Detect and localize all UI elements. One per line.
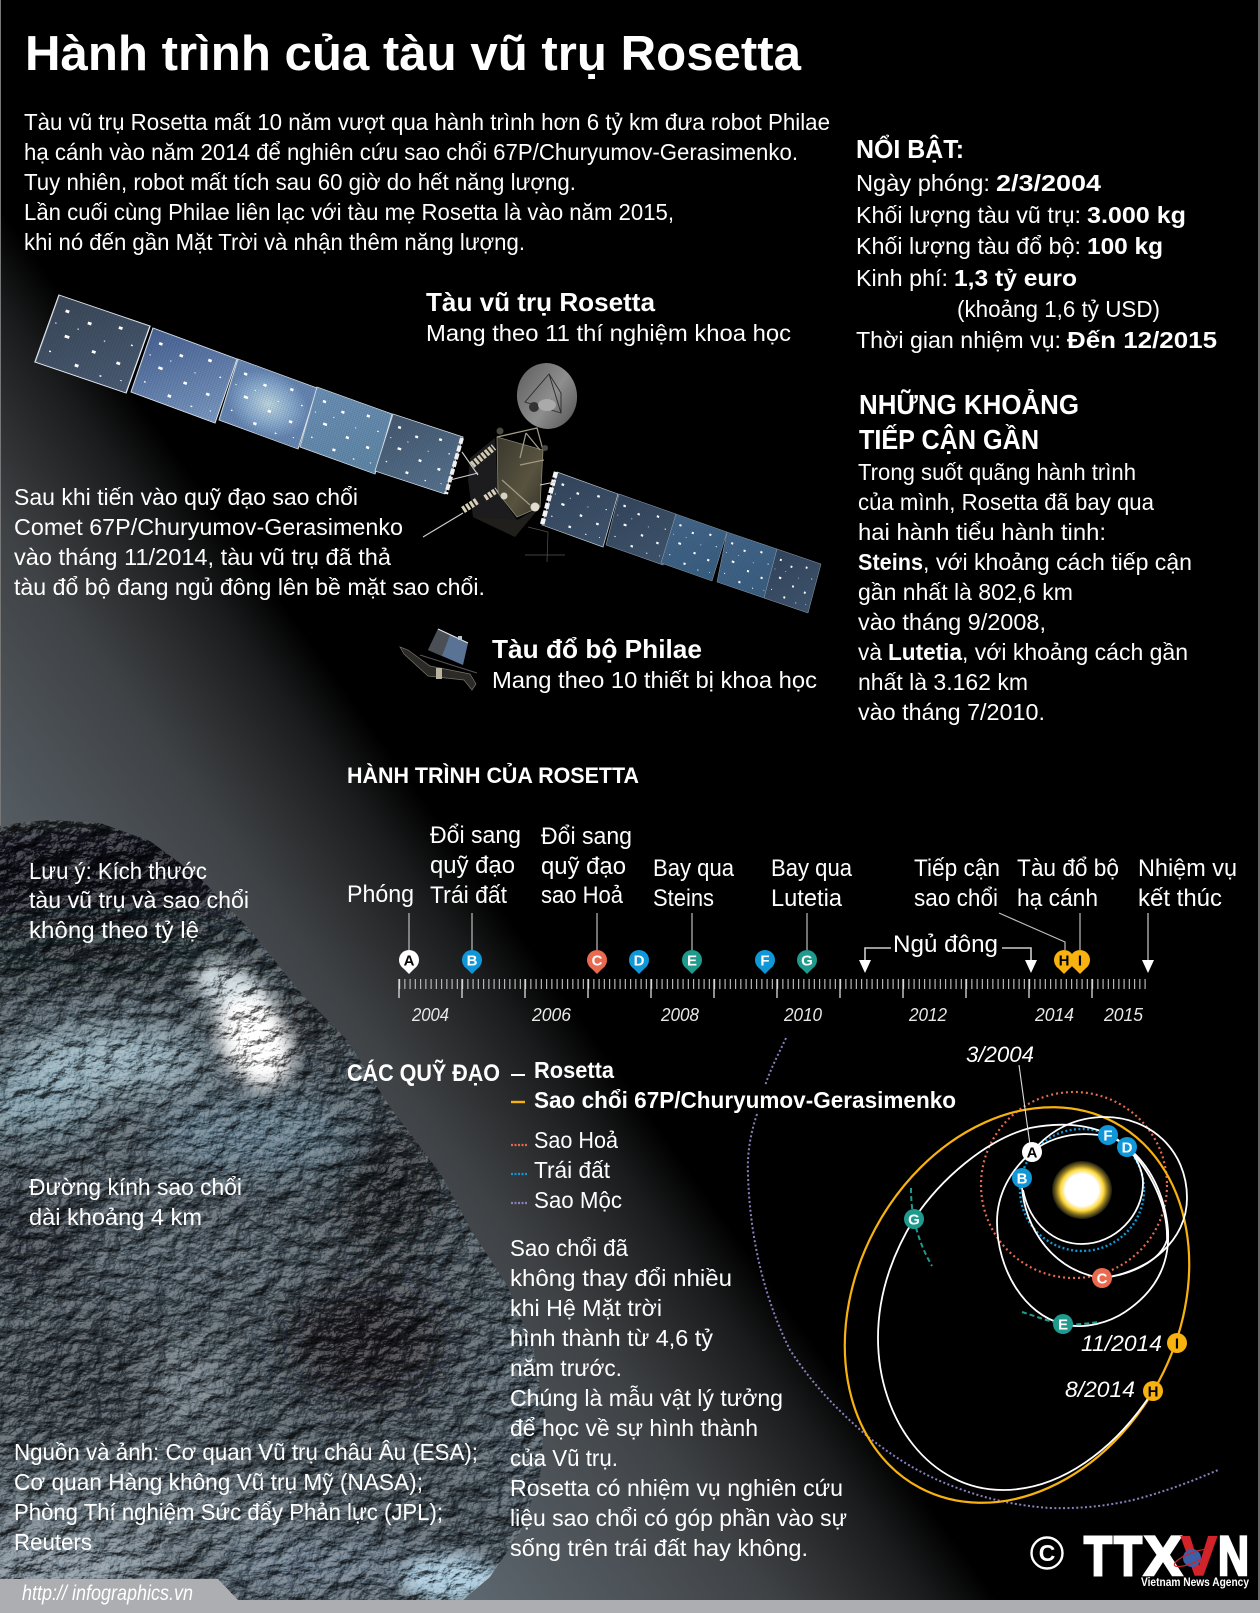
title: Hành trình của tàu vũ trụ Rosetta: [25, 27, 802, 81]
source credits: Reuters: [14, 1529, 92, 1555]
text: comet significance: để học về sự hình thành: [510, 1415, 758, 1441]
timeline event labels: Tàu đổ bộ: [1017, 855, 1119, 882]
text: comet significance: sống trên trái đất hay không.: [510, 1535, 808, 1561]
text: comet orbit release note: Sau khi tiến vào quỹ đạo sao chổi: [14, 484, 358, 510]
timeline pins A to I: I: [1078, 952, 1082, 970]
panel: close approaches: Lutetia: [888, 639, 963, 665]
timeline event labels: Bay qua: [653, 855, 735, 882]
timeline pins A to I: B: [467, 952, 478, 970]
Rosetta trajectory: [878, 1117, 1187, 1490]
copyright symbol: [1032, 1538, 1062, 1568]
heading: Rosetta spacecraft: [426, 287, 791, 346]
timeline year labels: 2015: [1103, 1005, 1144, 1025]
heading: Rosetta spacecraft: Tàu vũ trụ Rosetta: [426, 287, 656, 317]
comet note: diameter: dài khoảng 4 km: [29, 1204, 202, 1230]
timeline year labels: 2014: [1034, 1005, 1074, 1025]
comet note: scale: Lưu ý: Kích thước: [29, 858, 207, 884]
text: comet orbit release note: Comet 67P/Churyumov-Gerasimenko: [14, 514, 403, 540]
panel: close approaches: , với khoảng cách gần: [962, 639, 1188, 665]
hibernation marker: Ngủ đông: [893, 931, 998, 958]
panel: highlights: Đến 12/2015: [1067, 327, 1217, 353]
comet note: diameter: [29, 1174, 242, 1230]
panel: highlights: 3.000 kg: [1087, 202, 1186, 228]
text: comet significance: không thay đổi nhiều: [510, 1265, 732, 1291]
timeline event labels: sao Hoả: [541, 882, 624, 909]
timeline pins A to I: G: [801, 952, 813, 970]
timeline event labels: Đổi sang: [541, 823, 632, 850]
orbit pins and dates: C: [1097, 1270, 1108, 1288]
text: comet significance: Chúng là mẫu vật lý tưởng: [510, 1385, 783, 1411]
timeline heading: HÀNH TRÌNH CỦA ROSETTA: [347, 763, 639, 788]
source credits: Cơ quan Hàng không Vũ trụ Mỹ (NASA);: [14, 1469, 423, 1495]
launch date leader: [1019, 1065, 1030, 1145]
orbit legend: Sao Hoả: [534, 1127, 619, 1153]
comet note: scale: tàu vũ trụ và sao chổi: [29, 887, 249, 913]
panel: close approaches: gần nhất là 802,6 km: [858, 579, 1073, 605]
timeline axis and ticks: [399, 979, 1149, 998]
timeline year labels: 2012: [908, 1005, 947, 1025]
comet note: scale: không theo tỷ lệ: [29, 917, 199, 943]
orbit pins and dates: 11/2014: [1081, 1331, 1162, 1356]
TTXVN logo: X: [1144, 1524, 1182, 1587]
Mars orbit: [981, 1092, 1167, 1278]
heading: Philae lander: [492, 634, 817, 693]
panel: close approaches: Steins: [858, 549, 923, 575]
orbit pins and dates: G: [908, 1212, 920, 1228]
Earth orbit: [1020, 1129, 1144, 1251]
panel: highlights: NỔI BẬT:: [856, 134, 964, 164]
orbit pins and dates: D: [1122, 1140, 1133, 1156]
mission end arrow: [1142, 913, 1154, 973]
panel: highlights: Khối lượng tàu vũ trụ:: [856, 202, 1081, 228]
left solar wing: [35, 295, 463, 494]
text: comet significance: [510, 1235, 847, 1561]
timeline pins A to I: H: [1059, 952, 1069, 970]
bottom band: [0, 1579, 1260, 1613]
source credits: [14, 1439, 478, 1555]
orbit pins and dates: B: [1017, 1170, 1028, 1188]
panel: close approaches: Trong suốt quãng hành trình: [858, 459, 1136, 485]
intro text block: [24, 109, 830, 255]
timeline event labels: Nhiệm vụ: [1138, 855, 1237, 882]
panel: close approaches: nhất là 3.162 km: [858, 669, 1028, 695]
asteroid orbit segments: [911, 1188, 1098, 1324]
heading: Rosetta spacecraft: Mang theo 11 thí nghiệm khoa học: [426, 320, 791, 346]
comet note: diameter: Đường kính sao chổi: [29, 1174, 242, 1200]
orbit pins and dates: I: [1175, 1336, 1179, 1352]
timeline event labels: hạ cánh: [1017, 885, 1098, 912]
panel: close approaches: NHỮNG KHOẢNG: [859, 388, 1079, 420]
illustration: Rosetta spacecraft: [35, 295, 821, 613]
timeline event labels: quỹ đạo: [430, 852, 515, 879]
sun: [1052, 1161, 1112, 1219]
timeline event labels: Lutetia: [771, 885, 843, 912]
heading: Philae lander: Tàu đổ bộ Philae: [492, 634, 702, 664]
orbit legend: [347, 1057, 956, 1213]
orbit legend: Sao chổi 67P/Churyumov-Gerasimenko: [534, 1087, 956, 1113]
timeline pins A to I: D: [634, 952, 645, 970]
panel: highlights: 100 kg: [1087, 233, 1163, 259]
panel: highlights: Kinh phí:: [856, 265, 948, 291]
comet note: scale: [29, 858, 249, 943]
panel: highlights: (khoảng 1,6 tỷ USD): [957, 296, 1160, 322]
orbit pins and dates: E: [1058, 1316, 1068, 1334]
text: comet orbit release note: [14, 484, 485, 600]
timeline stems: [409, 913, 1080, 950]
timeline event labels: [347, 822, 1237, 912]
panel: close approaches: của mình, Rosetta đã bay qua: [858, 489, 1155, 515]
text: comet orbit release note: vào tháng 11/2014, tàu vũ trụ đã thả: [14, 544, 392, 570]
source credits: Phòng Thí nghiệm Sức đẩy Phản lực (JPL);: [14, 1499, 443, 1525]
panel: highlights: 2/3/2004: [996, 170, 1101, 196]
text: comet significance: hình thành từ 4,6 tỷ: [510, 1325, 713, 1351]
orbit pins and dates: A: [1027, 1144, 1038, 1162]
orbit pins and dates: [904, 1042, 1187, 1402]
timeline pins A to I: F: [760, 952, 770, 970]
panel: close approaches: , với khoảng cách tiếp cận: [923, 549, 1192, 575]
heading: Philae lander: Mang theo 10 thiết bị khoa học: [492, 667, 817, 693]
timeline event labels: Trái đất: [430, 882, 507, 909]
timeline year labels: 2006: [531, 1005, 572, 1025]
panel: close approaches: và: [858, 639, 883, 665]
orbit legend: CÁC QUỸ ĐẠO: [347, 1059, 500, 1087]
timeline pins A to I: E: [687, 952, 697, 970]
text: comet significance: liệu sao chổi có góp phần vào sự: [510, 1505, 847, 1531]
right solar wing: [542, 472, 821, 613]
copyright symbol: C: [1039, 1540, 1055, 1566]
TTXVN logo: N: [1218, 1524, 1249, 1587]
timeline pins A to I: A: [404, 952, 415, 970]
intro text block: khi nó đến gần Mặt Trời và nhận thêm năng lượng.: [24, 229, 525, 255]
intro text block: Tuy nhiên, robot mất tích sau 60 giờ do hết năng lượng.: [24, 169, 576, 195]
text: comet significance: Rosetta có nhiệm vụ nghiên cứu: [510, 1475, 843, 1501]
orbit diagram: [748, 1038, 1256, 1563]
website url: http:// infographics.vn: [22, 1582, 193, 1605]
TTXVN logo: V: [1181, 1524, 1217, 1587]
intro text block: Lần cuối cùng Philae liên lạc với tàu mẹ Rosetta là vào năm 2015,: [24, 199, 674, 225]
timeline event labels: Tiếp cận: [914, 855, 1000, 882]
panel: highlights: Ngày phóng:: [856, 170, 990, 196]
timeline event labels: Bay qua: [771, 855, 853, 882]
TTXVN logo: T: [1114, 1524, 1142, 1587]
timeline event labels: Steins: [653, 885, 714, 912]
panel: close approaches: vào tháng 9/2008,: [858, 609, 1046, 635]
text: comet significance: năm trước.: [510, 1355, 622, 1381]
antenna dish: [513, 359, 581, 433]
timeline pins A to I: [399, 950, 1090, 974]
text: comet orbit release note: tàu đổ bộ đang ngủ đông lên bề mặt sao chổi.: [14, 574, 485, 600]
panel: close approaches: hai hành tiểu hành tinh:: [858, 519, 1106, 545]
illustration: Philae lander: [400, 629, 477, 690]
Jupiter orbit: [748, 1038, 1218, 1508]
panel: close approaches: [858, 388, 1192, 725]
orbit legend: Sao Mộc: [534, 1187, 622, 1213]
text: comet significance: của Vũ trụ.: [510, 1445, 618, 1471]
timeline pins A to I: C: [592, 952, 603, 970]
text: comet significance: Sao chổi đã: [510, 1235, 629, 1261]
source credits: Nguồn và ảnh: Cơ quan Vũ trụ châu Âu (ESA);: [14, 1439, 478, 1465]
intro text block: hạ cánh vào năm 2014 để nghiên cứu sao chổi 67P/Churyumov-Gerasimenko.: [24, 139, 798, 165]
panel: highlights: 1,3 tỷ euro: [954, 265, 1077, 291]
hibernation marker: [859, 931, 1037, 973]
timeline year labels: 2008: [660, 1005, 699, 1025]
spacecraft body: [423, 428, 565, 562]
intro text block: Tàu vũ trụ Rosetta mất 10 năm vượt qua hành trình hơn 6 tỷ km đưa robot Philae: [24, 109, 830, 135]
timeline year labels: 2004: [411, 1005, 449, 1025]
panel: highlights: Thời gian nhiệm vụ:: [856, 327, 1061, 353]
TTXVN logo: T: [1084, 1524, 1112, 1587]
orbit pins and dates: 8/2014: [1065, 1377, 1135, 1402]
text: comet significance: khi Hệ Mặt trời: [510, 1295, 662, 1321]
comet orbit: [778, 1047, 1256, 1563]
timeline event labels: quỹ đạo: [541, 853, 626, 880]
orbit legend: Rosetta: [534, 1057, 615, 1083]
orbit legend: Trái đất: [534, 1157, 610, 1183]
panel: highlights: Khối lượng tàu đổ bộ:: [856, 233, 1081, 259]
timeline year labels: [411, 1005, 1144, 1025]
panel: close approaches: TIẾP CẬN GẦN: [859, 424, 1039, 455]
orbit pins and dates: H: [1148, 1384, 1158, 1400]
panel: close approaches: vào tháng 7/2010.: [858, 699, 1045, 725]
timeline year labels: 2010: [783, 1005, 822, 1025]
orbit pins and dates: 3/2004: [966, 1042, 1034, 1067]
comet surface image: [0, 800, 560, 1602]
timeline event labels: Đổi sang: [430, 822, 521, 849]
timeline event labels: sao chổi: [914, 885, 998, 912]
timeline event labels: Phóng: [347, 881, 414, 908]
orbit pins and dates: F: [1103, 1128, 1113, 1144]
panel: highlights: [856, 134, 1217, 353]
timeline event labels: kết thúc: [1138, 885, 1222, 912]
TTXVN logo: [1084, 1524, 1249, 1589]
